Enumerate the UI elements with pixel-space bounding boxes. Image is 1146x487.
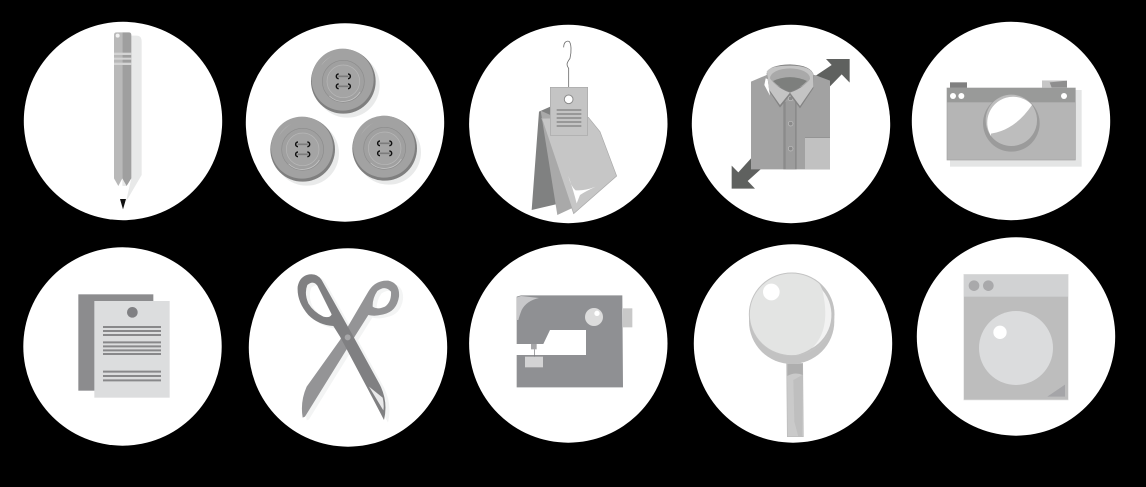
icon: documents: [78, 294, 170, 398]
icon: scissors: [298, 274, 403, 423]
panel: buttons: [246, 23, 444, 222]
icon: sewing machine: [517, 295, 632, 387]
panel: washing machine: [917, 237, 1115, 436]
icon: pencil: [114, 32, 142, 209]
panel: shirt resize: [692, 25, 890, 223]
icon: washing machine: [964, 274, 1068, 400]
icon: shirt with resize arrows: [732, 59, 850, 189]
icon: camera: [947, 81, 1082, 167]
panel: camera: [912, 22, 1110, 220]
panel: scissors: [249, 248, 447, 447]
panel: hang tags: [469, 25, 668, 223]
panel: documents: [23, 247, 222, 446]
icon: three buttons: [270, 49, 421, 186]
panel: sewing machine: [469, 244, 668, 443]
panel: pencil: [24, 22, 222, 220]
panel: magnifying glass: [694, 244, 892, 443]
icon: magnifying glass: [749, 273, 834, 437]
icon: hang tags: [532, 41, 617, 215]
